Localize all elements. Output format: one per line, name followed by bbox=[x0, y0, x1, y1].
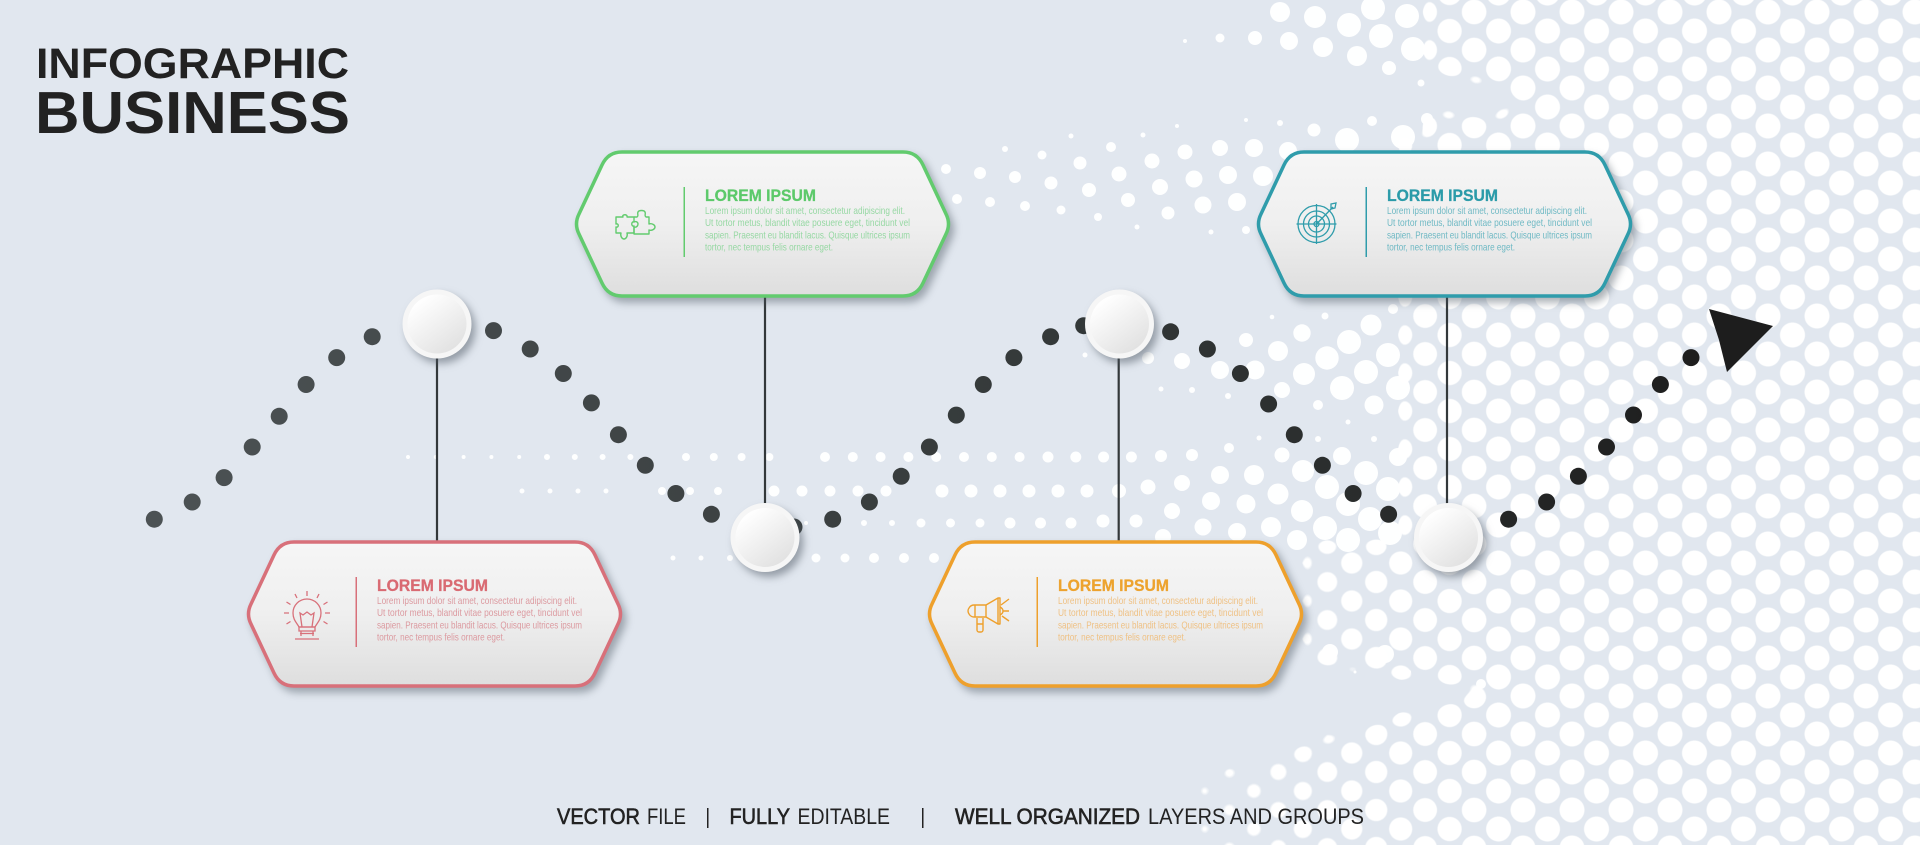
heading: LOREM IPSUM bbox=[705, 186, 816, 205]
divider bbox=[1366, 187, 1367, 257]
footer tagline: WELL ORGANIZED bbox=[955, 804, 1140, 829]
halftone horizontal rows of dots bbox=[408, 457, 1140, 558]
heading: LOREM IPSUM bbox=[1387, 186, 1498, 205]
icon: puzzle bbox=[616, 210, 655, 239]
icon: target bbox=[1296, 203, 1336, 244]
body text: Ut tortor metus, blandit vitae posuere eget, tincidunt vel bbox=[705, 217, 910, 229]
body text: tortor, nec tempus felis ornare eget. bbox=[1058, 632, 1186, 644]
body text: tortor, nec tempus felis ornare eget. bbox=[705, 242, 833, 254]
node: step 3 bbox=[1085, 290, 1154, 358]
footer tagline: LAYERS AND GROUPS bbox=[1148, 804, 1364, 829]
halftone hand-placed transition dots bbox=[941, 0, 1486, 689]
body text: Lorem ipsum dolor sit amet, consectetur adipiscing elit. bbox=[377, 595, 577, 607]
footer tagline: EDITABLE bbox=[798, 804, 890, 829]
body text bbox=[705, 205, 910, 254]
arrow head bbox=[1709, 309, 1773, 372]
body text: Ut tortor metus, blandit vitae posuere eget, tincidunt vel bbox=[1058, 607, 1263, 619]
body text bbox=[1387, 205, 1592, 254]
footer tagline bbox=[557, 804, 1364, 829]
footer tagline: FILE bbox=[647, 804, 686, 829]
dotted wave path bbox=[146, 317, 1699, 536]
body text bbox=[1058, 595, 1263, 644]
body text: Lorem ipsum dolor sit amet, consectetur adipiscing elit. bbox=[1387, 205, 1587, 217]
panel: green puzzle bbox=[576, 152, 948, 296]
body text: Ut tortor metus, blandit vitae posuere eget, tincidunt vel bbox=[1387, 217, 1592, 229]
divider bbox=[1036, 577, 1038, 647]
body text: Lorem ipsum dolor sit amet, consectetur adipiscing elit. bbox=[705, 205, 905, 217]
heading: LOREM IPSUM bbox=[1058, 576, 1169, 595]
body text: tortor, nec tempus felis ornare eget. bbox=[1387, 242, 1515, 254]
panel: orange megaphone bbox=[930, 542, 1302, 686]
body text: tortor, nec tempus felis ornare eget. bbox=[377, 632, 505, 644]
divider bbox=[684, 187, 685, 257]
body text bbox=[377, 595, 582, 644]
heading: LOREM IPSUM bbox=[377, 576, 488, 595]
title: INFOGRAPHIC bbox=[36, 40, 349, 88]
title: BUSINESS bbox=[35, 79, 350, 146]
body text: Lorem ipsum dolor sit amet, consectetur adipiscing elit. bbox=[1058, 595, 1258, 607]
node: step 4 bbox=[1414, 503, 1483, 572]
halftone dot field on the right bbox=[1180, 0, 1920, 845]
body text: sapien. Praesent eu blandit lacus. Quisque ultrices ipsum bbox=[377, 619, 582, 631]
node: step 1 bbox=[402, 290, 472, 358]
body text: Ut tortor metus, blandit vitae posuere eget, tincidunt vel bbox=[377, 607, 582, 619]
body text: sapien. Praesent eu blandit lacus. Quisque ultrices ipsum bbox=[1058, 619, 1263, 631]
footer tagline: FULLY bbox=[730, 804, 790, 829]
title bbox=[35, 40, 350, 146]
panel: red lightbulb bbox=[248, 542, 620, 686]
icon: megaphone bbox=[968, 598, 1009, 632]
body text: sapien. Praesent eu blandit lacus. Quisque ultrices ipsum bbox=[705, 229, 910, 241]
footer tagline: VECTOR bbox=[557, 804, 640, 829]
node: step 2 bbox=[730, 503, 800, 572]
icon: lightbulb bbox=[284, 591, 330, 639]
connector lines bbox=[437, 294, 1447, 544]
divider bbox=[356, 577, 357, 647]
panel: teal target bbox=[1258, 152, 1630, 296]
body text: sapien. Praesent eu blandit lacus. Quisque ultrices ipsum bbox=[1387, 229, 1592, 241]
